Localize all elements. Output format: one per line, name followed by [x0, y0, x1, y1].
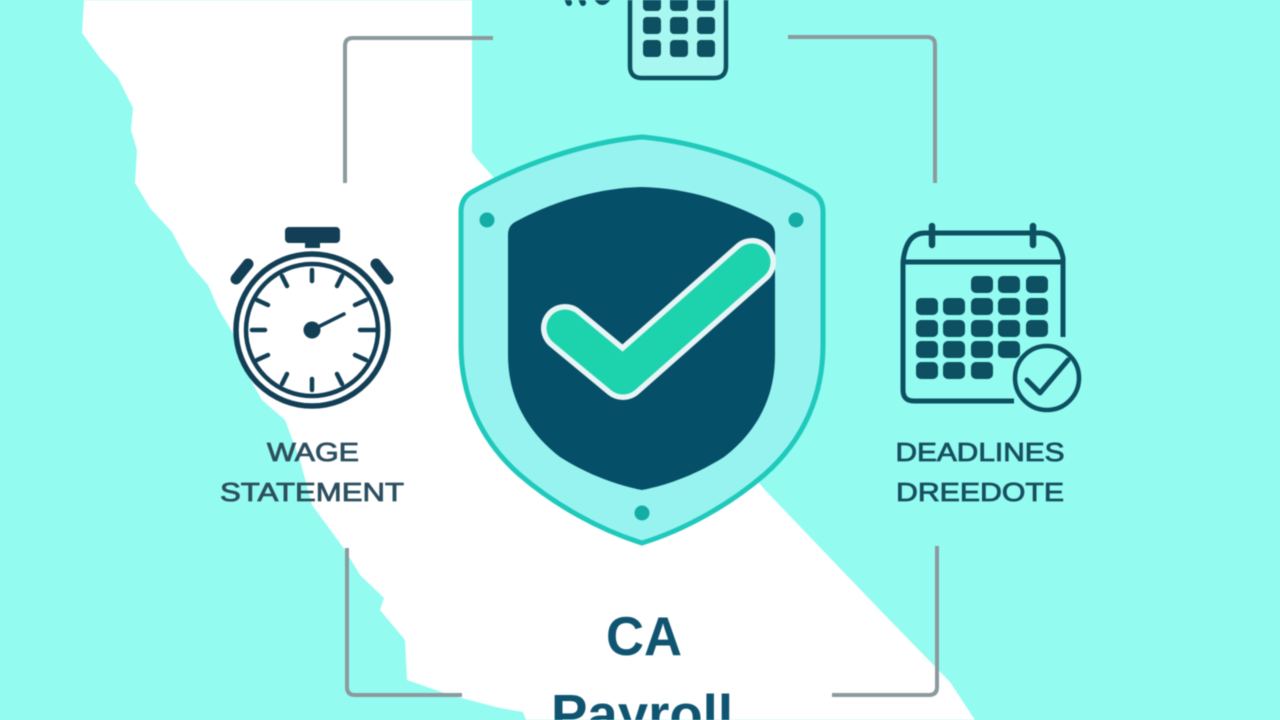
map: California silhouette [82, 0, 975, 720]
shield inner panel [508, 187, 775, 490]
label: wage statement: STATEMENT [220, 477, 404, 507]
title: CA [606, 605, 682, 667]
icon: top calendar, cropped [567, 0, 726, 78]
frame: bottom-right bracket [832, 546, 937, 695]
label: deadlines: DREEDOTE [896, 477, 1064, 507]
shield rivets [480, 212, 804, 520]
check mark [565, 262, 752, 376]
title [551, 605, 733, 720]
label: wage statement: WAGE [267, 437, 359, 467]
icon: stopwatch [236, 227, 388, 406]
shield outer plate [461, 137, 823, 543]
icon: deadlines calendar with check [903, 226, 1079, 410]
frame: top-left bracket [345, 38, 493, 183]
shield with check mark [461, 137, 823, 543]
label: deadlines [896, 437, 1064, 507]
label: deadlines: DEADLINES [896, 437, 1064, 467]
frame: top-right bracket [788, 37, 935, 183]
label: wage statement [220, 437, 404, 507]
frame: bottom-left bracket [347, 548, 462, 695]
